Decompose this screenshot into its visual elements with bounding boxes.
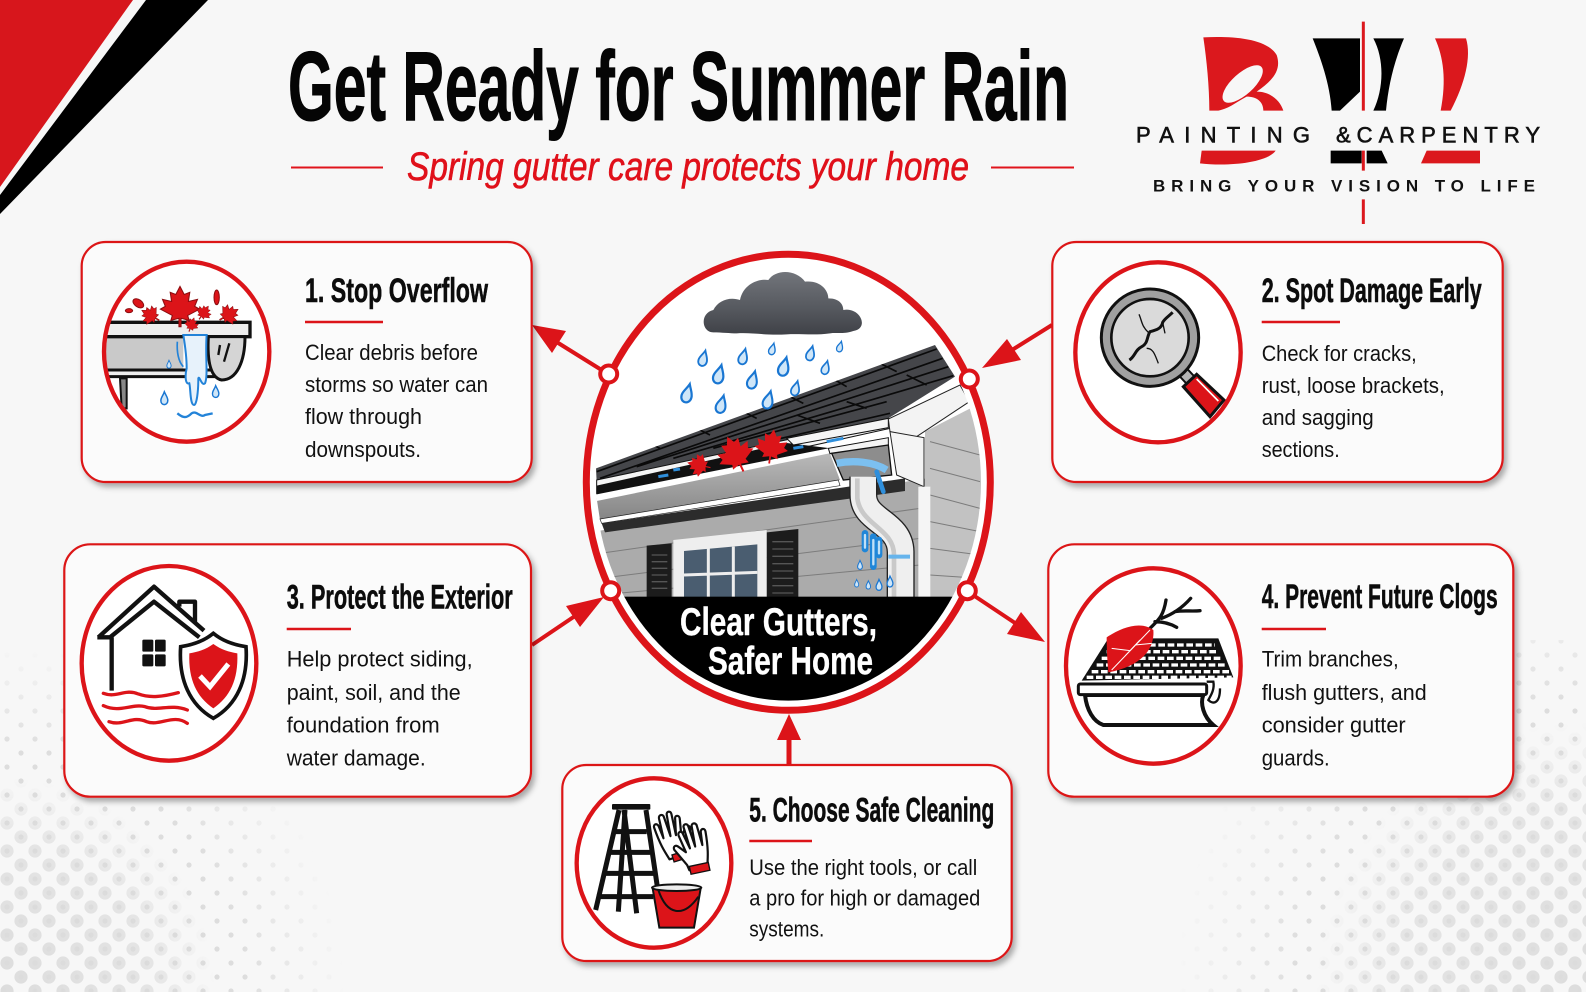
arrow: safe cleaning card to centre bbox=[777, 714, 801, 765]
body text: downspouts. bbox=[305, 437, 421, 462]
body text: foundation from bbox=[287, 713, 440, 738]
halftone small dots in bottom corners bbox=[0, 640, 1586, 992]
body text: storms so water can bbox=[305, 372, 488, 397]
body text: Clear debris before bbox=[305, 340, 478, 365]
body text: Check for cracks, bbox=[1262, 341, 1417, 366]
heading: 3. Protect the Exterior bbox=[287, 578, 513, 616]
gutter with debris bbox=[597, 418, 905, 532]
black caption band bbox=[624, 596, 952, 701]
window with shutters bbox=[647, 529, 798, 598]
icon: overflowing gutter bbox=[103, 262, 269, 442]
body text: systems. bbox=[749, 917, 824, 942]
shingled roof bbox=[596, 345, 955, 482]
central illustration: house gutter in rain bbox=[580, 254, 1000, 710]
body text: sections. bbox=[1262, 437, 1340, 462]
corner accent: red and black slashes bbox=[0, 0, 208, 214]
logo: BVL Painting & Carpentry bbox=[1136, 22, 1540, 224]
downspout with water bbox=[837, 462, 910, 598]
logo: BVL Painting & Carpentry: &CARPENTRY bbox=[1336, 123, 1540, 148]
panel: 1. Stop Overflow bbox=[82, 242, 532, 482]
logo: BVL Painting & Carpentry: PAINTING bbox=[1136, 123, 1310, 148]
raindrops bbox=[680, 341, 844, 414]
storm cloud bbox=[704, 272, 862, 335]
fascia corner and end cap bbox=[832, 385, 969, 598]
heading: 5. Choose Safe Cleaning bbox=[749, 792, 994, 830]
arrow: damage card to centre bbox=[982, 325, 1052, 368]
arrow: overflow card from centre bbox=[532, 325, 608, 374]
body text: a pro for high or damaged bbox=[749, 886, 980, 911]
falling water drops bbox=[855, 560, 893, 590]
body text bbox=[1262, 341, 1445, 462]
panel: 3. Protect the Exterior bbox=[64, 544, 531, 797]
arrow: exterior card to centre bbox=[532, 597, 604, 645]
body text: paint, soil, and the bbox=[287, 680, 461, 705]
connector nodes on the central ring bbox=[600, 366, 978, 599]
body text: Use the right tools, or call bbox=[749, 855, 977, 880]
icon: house with shield bbox=[82, 566, 256, 761]
central illustration: house gutter in rain: Clear Gutters, bbox=[680, 601, 877, 644]
body text bbox=[305, 340, 488, 462]
body text: rust, loose brackets, bbox=[1262, 373, 1445, 398]
icon: gutter guard with leaf bbox=[1066, 568, 1241, 764]
siding wall bbox=[593, 402, 983, 598]
body text: Trim branches, bbox=[1262, 647, 1399, 672]
body text bbox=[1262, 647, 1427, 771]
title: Get Ready for Summer Rain bbox=[288, 31, 1069, 141]
body text: guards. bbox=[1262, 746, 1330, 771]
panel: 2. Spot Damage Early bbox=[1052, 242, 1503, 482]
logo: BVL Painting & Carpentry: BRING YOUR VISION TO LIFE bbox=[1153, 177, 1535, 196]
body text: water damage. bbox=[286, 746, 426, 771]
halftone large dots in bottom corners bbox=[0, 756, 1586, 992]
body text: flush gutters, and bbox=[1262, 680, 1427, 705]
body text bbox=[749, 855, 980, 942]
body text: Help protect siding, bbox=[287, 647, 473, 672]
icon: magnifier over crack bbox=[1075, 262, 1241, 442]
heading: 1. Stop Overflow bbox=[305, 272, 488, 310]
body text: and sagging bbox=[1262, 405, 1374, 430]
subtitle with side rules: Spring gutter care protects your home bbox=[407, 145, 969, 189]
arrow: centre to clogs card bbox=[967, 591, 1045, 642]
panel: 4. Prevent Future Clogs bbox=[1048, 544, 1513, 797]
panel: 5. Choose Safe Cleaning bbox=[562, 765, 1012, 961]
icon: ladder, gloves and bucket bbox=[577, 778, 731, 948]
body text bbox=[286, 647, 473, 771]
body text: flow through bbox=[305, 404, 422, 429]
central illustration: house gutter in rain: Safer Home bbox=[708, 640, 873, 683]
body text: consider gutter bbox=[1262, 713, 1406, 738]
